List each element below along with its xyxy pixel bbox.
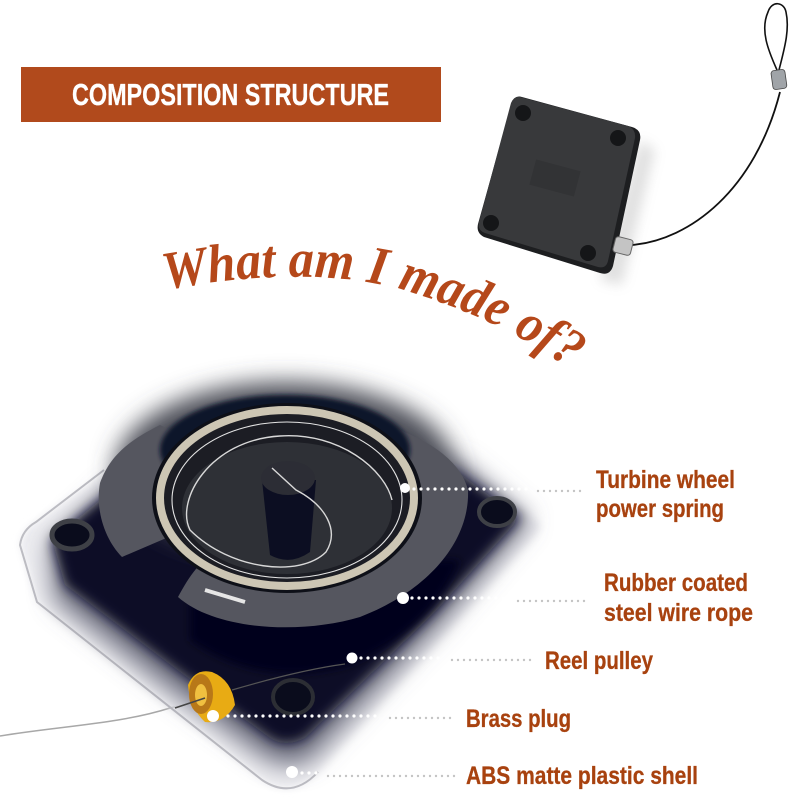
body under ring — [190, 560, 460, 673]
title banner — [21, 67, 441, 122]
soft gray fade around plate — [50, 462, 530, 765]
silver ring — [160, 410, 414, 586]
dark base plate — [52, 470, 520, 743]
gray cover: left lobe — [99, 425, 210, 557]
callout: reel pulley: Reel pulley — [545, 647, 653, 675]
callout: rubber coated steel wire rope — [397, 569, 753, 627]
translucent shell fill — [20, 450, 540, 788]
title banner: COMPOSITION STRUCTURE — [72, 77, 389, 112]
callout: brass plug: Brass plug — [466, 705, 571, 733]
callout: brass plug — [207, 705, 571, 733]
thin wire — [0, 700, 200, 736]
gray cover: right and lower band — [178, 415, 468, 627]
halo above ring — [115, 382, 455, 558]
script heading: What am I made of? — [163, 244, 586, 361]
inner ring floor — [182, 442, 392, 574]
callout: rubber coated steel wire rope: Rubber coated — [604, 569, 748, 597]
callout: reel pulley — [346, 647, 653, 675]
callout: turbine wheel power spring — [400, 466, 735, 523]
callout: ABS matte plastic shell — [286, 762, 698, 790]
mounting holes — [52, 521, 92, 549]
centre post — [262, 480, 316, 560]
brass plug — [175, 664, 345, 722]
callout: rubber coated steel wire rope: steel wire rope — [604, 599, 753, 627]
inner ellipse detail — [172, 422, 402, 578]
shell outline — [20, 470, 318, 788]
callout: turbine wheel power spring: Turbine wheel — [596, 466, 735, 494]
spiral spring — [187, 436, 392, 567]
dark upper rim — [160, 395, 410, 505]
product photo: retractable device with wire loop — [478, 4, 787, 285]
callout: turbine wheel power spring: power spring — [596, 495, 724, 523]
exploded device photo — [0, 382, 540, 788]
ring cavity — [152, 403, 422, 593]
callout: ABS matte plastic shell: ABS matte plastic shell — [466, 762, 698, 790]
ring notch — [205, 590, 245, 602]
